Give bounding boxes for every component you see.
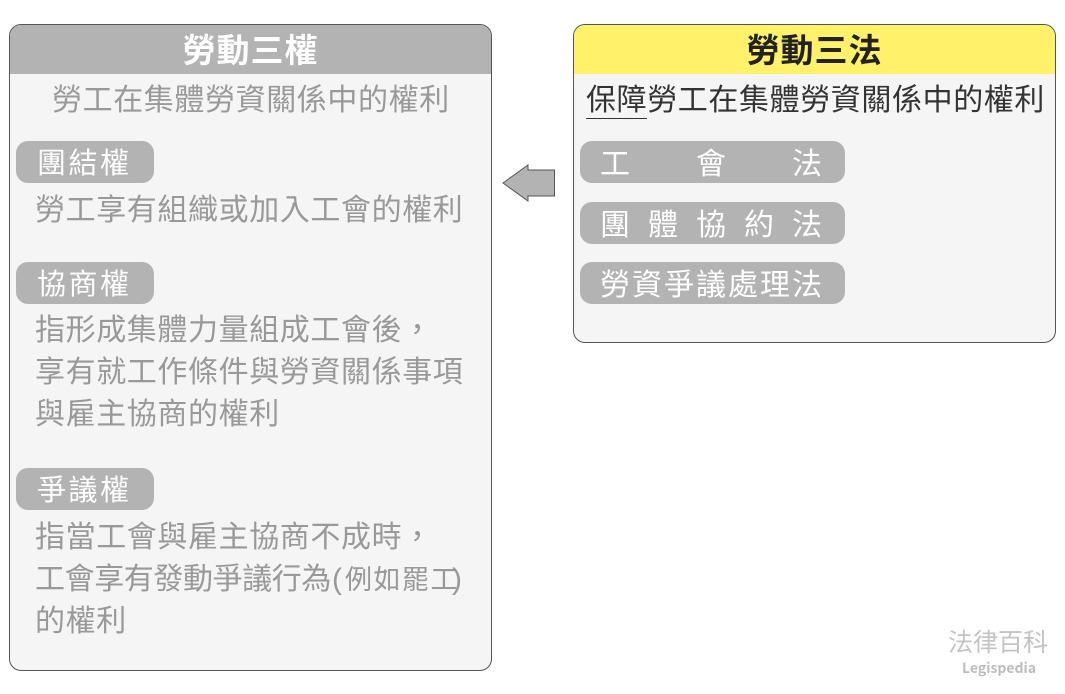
label: 協商權 <box>16 262 154 304</box>
text: 爭議權 description: 的權利 <box>35 605 127 638</box>
label: 團結權 <box>16 141 154 183</box>
label: 團體協約法: 體 <box>648 209 678 242</box>
label: 勞資爭議處理法 <box>580 262 845 304</box>
label: 團體協約法 <box>580 202 845 244</box>
logo text: 法律百科: 法律百科 <box>948 629 1048 657</box>
text: 爭議權 description: 指當工會與雇主協商不成時， <box>35 521 433 554</box>
logo text: Legispedia: Legispedia <box>962 658 1036 678</box>
text: 協商權 description: 與雇主協商的權利 <box>35 398 280 431</box>
label: 團體協約法: 團 <box>600 209 630 242</box>
text: 協商權 description: 享有就工作條件與勞資關係事項 <box>35 356 463 389</box>
label: 工會法: 工 <box>600 148 630 181</box>
text: 爭議權 description <box>35 521 462 638</box>
label: 爭議權 <box>16 468 154 510</box>
label: 團體協約法: 協 <box>696 209 726 242</box>
text: 團結權 description: 勞工享有組織或加入工會的權利 <box>35 194 463 227</box>
label: 爭議權: 爭議權 <box>37 475 132 507</box>
subtitle: 保障勞工在集體勞資關係中的權利 <box>586 84 1045 117</box>
label: 團結權: 團結權 <box>37 148 132 180</box>
text: 爭議權 description: 工會享有發動爭議行為(例如罷工) <box>35 563 462 596</box>
label: 團體協約法: 約 <box>744 209 774 242</box>
text: 協商權 description: 指形成集體力量組成工會後， <box>35 314 433 347</box>
label: 勞資爭議處理法: 勞資爭議處理法 <box>600 269 824 302</box>
label: 工會法: 法 <box>792 148 822 181</box>
panel: 勞動三法 <box>573 24 1056 343</box>
text: 協商權 description <box>35 314 463 431</box>
label: 協商權: 協商權 <box>37 269 132 301</box>
label: 工會法: 會 <box>696 148 726 181</box>
label: 團體協約法: 法 <box>792 209 822 242</box>
subtitle: 勞工在集體勞資關係中的權利 <box>52 84 450 117</box>
heading: 勞動三權 <box>10 25 491 74</box>
underline: 保障 <box>586 118 647 119</box>
logo: 法律百科 Legispedia <box>948 629 1048 678</box>
arrow: pointing left <box>502 164 555 202</box>
label: 工會法 <box>580 141 845 183</box>
heading: 勞動三法 <box>574 25 1055 74</box>
heading: 勞動三權: 勞動三權 <box>182 32 318 69</box>
heading: 勞動三法: 勞動三法 <box>746 32 882 69</box>
panel: 勞動三權 <box>9 24 492 671</box>
